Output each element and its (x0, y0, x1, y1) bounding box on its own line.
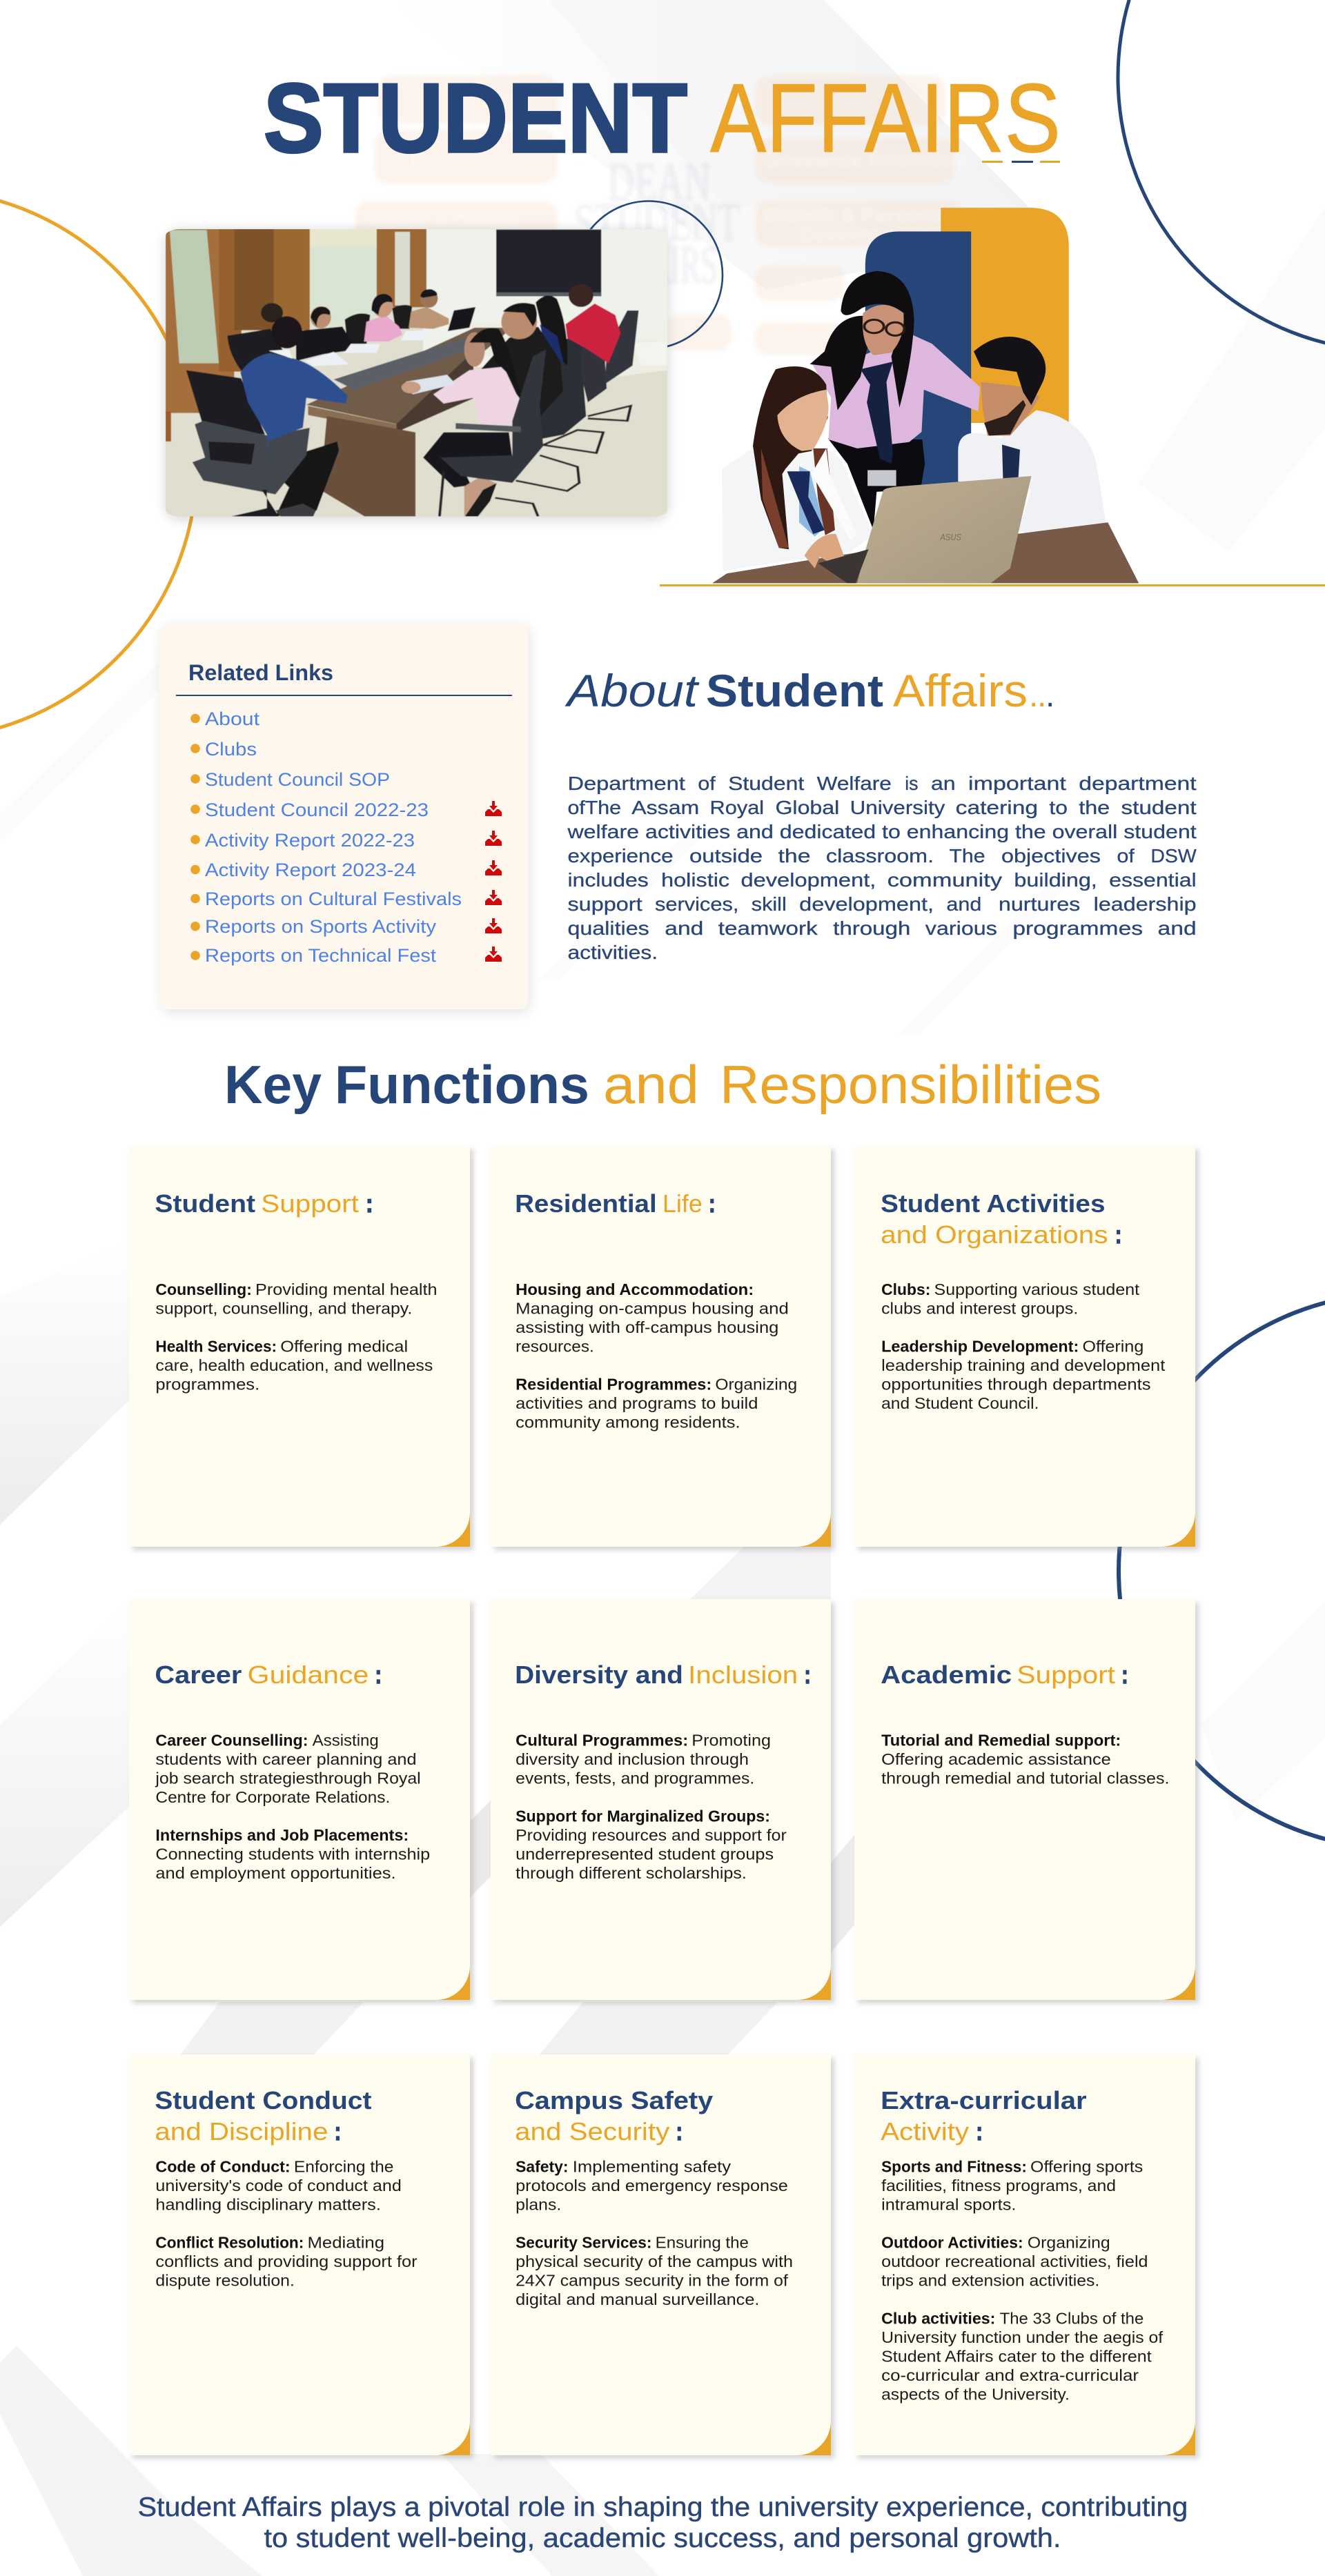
text: student support details: Counselling: (155, 1280, 252, 1298)
standing woman (810, 271, 980, 530)
text: student support details: care, health education, and wellness (155, 1356, 433, 1374)
text: campus safety details: Safety: (516, 2158, 569, 2175)
laptop: ASUS (940, 533, 961, 543)
text block: about paragraph: skill (752, 893, 787, 915)
text block: about paragraph: support (567, 893, 642, 915)
link list: Reports on Sports Activity (205, 916, 437, 937)
heading: student activities and organizations (881, 1190, 1121, 1249)
heading: student conduct and discipline: and Discipline (155, 2118, 328, 2146)
heading: diversity and inclusion: Diversity and (515, 1661, 683, 1689)
heading: about student affairs: About (565, 665, 700, 716)
woman in black (296, 326, 356, 361)
heading: extra-curricular activity: Extra-curricular (881, 2087, 1087, 2114)
text: campus safety details: Implementing safety (573, 2158, 731, 2175)
heading: residential life: : (709, 1190, 715, 1218)
text: student activities details: clubs and interest groups. (881, 1300, 1078, 1317)
woman in pink cardigan (364, 315, 402, 341)
text block: about paragraph: of (1117, 844, 1135, 866)
text: diversity and inclusion details: underrepresented student groups (516, 1845, 774, 1863)
text block: about paragraph: University (850, 796, 945, 818)
background: ghosted organisation chart (355, 75, 968, 355)
text: student activities details: opportunities through departments (881, 1376, 1151, 1393)
table front (308, 406, 396, 433)
man in tan jacket (409, 307, 449, 329)
text: student support details (155, 1280, 437, 1393)
background: ghosted organisation chart: Clubs (766, 327, 823, 350)
text: student activities details: Clubs: (881, 1280, 930, 1298)
text: residential life details: Organizing (715, 1376, 797, 1393)
text block: about paragraph: essential (1109, 869, 1197, 891)
decorative circle: right navy beside cards (1119, 1294, 1325, 1848)
text: residential life details: Managing on-campus housing and (516, 1300, 789, 1317)
heading: student support: Support (261, 1190, 359, 1218)
text: extra-curricular details: Organizing (1028, 2234, 1110, 2251)
text: student activities details: Offering (1082, 1338, 1144, 1355)
decorative circle: left orange (0, 190, 197, 739)
heading: career guidance: Career (155, 1661, 242, 1689)
text block: about paragraph: Welfare (817, 772, 892, 794)
title: STUDENT (264, 63, 687, 173)
text: residential life details (516, 1280, 797, 1431)
seated woman (722, 366, 874, 571)
title: AFFAIRS (710, 63, 1061, 173)
heading: key functions and responsibilities (224, 1054, 1101, 1115)
background: ghosted organisation chart: STUDENT (574, 192, 740, 252)
background: ghosted organisation chart: Counselling (411, 149, 529, 172)
link list: Reports on Cultural Festivals (205, 889, 462, 909)
heading: career guidance: : (375, 1661, 382, 1689)
text: diversity and inclusion details: events, fests, and programmes. (516, 1770, 754, 1787)
front chair (440, 350, 546, 483)
text: residential life details: Residential Programmes: (516, 1376, 711, 1393)
heading: campus safety and security (515, 2087, 714, 2146)
heading: about student affairs: Student (706, 665, 883, 716)
text block: about paragraph: and (665, 917, 703, 939)
text: student conduct details: Code of Conduct: (155, 2158, 291, 2175)
panel: diversity and inclusion (491, 1599, 834, 2003)
laptop (448, 307, 475, 331)
decorative circle: small navy behind photo (575, 201, 723, 349)
text: career guidance details: students with career planning and (155, 1750, 417, 1768)
text: student support details: Providing mental health (255, 1280, 437, 1298)
text block: about paragraph: of (698, 772, 716, 794)
closing statement: to student well-being, academic success, and personal growth. (264, 2524, 1061, 2553)
text: student conduct details: university's code of conduct and (155, 2177, 402, 2194)
text block: about paragraph: to (1049, 796, 1068, 818)
text: student activities details: Supporting various student (934, 1280, 1140, 1298)
laptop (818, 476, 1031, 583)
heading: about student affairs: Affairs (893, 665, 1028, 716)
text block: about paragraph: the (778, 844, 810, 866)
text: academic support details (881, 1732, 1169, 1787)
heading: campus safety and security: and Security (515, 2118, 670, 2146)
heading: diversity and inclusion (515, 1661, 811, 1689)
text: diversity and inclusion details: Providing resources and support for (516, 1826, 787, 1844)
text: student conduct details: conflicts and providing support for (155, 2252, 418, 2270)
text: student support details: support, counselling, and therapy. (155, 1300, 412, 1317)
text block: about paragraph: and (1158, 917, 1197, 939)
blue sweater man (240, 353, 348, 460)
text block: about paragraph: building, (1014, 869, 1097, 891)
heading: student activities and organizations: and Organizations (881, 1221, 1108, 1249)
text block: about paragraph: catering (956, 796, 1038, 818)
text: extra-curricular details: aspects of the University. (881, 2386, 1070, 2403)
text: student conduct details: Conflict Resolution: (155, 2234, 304, 2251)
heading: key functions and responsibilities: and (603, 1054, 699, 1115)
text: academic support details: Tutorial and Remedial support: (881, 1732, 1121, 1749)
text block: about paragraph: development, (740, 869, 876, 891)
text block: about paragraph: ofThe (567, 796, 621, 818)
heading: student support: Student (155, 1190, 255, 1218)
text block: about paragraph: teamwork (718, 917, 818, 939)
heading: student support (155, 1190, 373, 1218)
table surface (306, 328, 505, 424)
text: extra-curricular details: Offering sports (1030, 2158, 1143, 2175)
text block: about paragraph: nurtures (999, 893, 1080, 915)
closing statement (138, 2493, 1188, 2553)
text block: about paragraph: is (905, 772, 919, 794)
heading: about student affairs: . (1029, 677, 1038, 714)
heading: extra-curricular activity: : (976, 2118, 983, 2146)
background: ghosted organisation chart: Grievance Redressal (763, 149, 968, 172)
text: extra-curricular details: Outdoor Activities: (881, 2234, 1023, 2251)
heading: related links: Related Links (188, 660, 333, 685)
background: ghosted organisation chart: AFFAIRS (593, 235, 718, 295)
link list: Student Council SOP (205, 769, 390, 790)
icons: download (485, 801, 502, 962)
far chairs (345, 305, 412, 345)
background: ghosted organisation chart: DEAN (607, 152, 711, 212)
text: extra-curricular details: Sports and Fitness: (881, 2158, 1027, 2175)
heading: student conduct and discipline: Student Conduct (155, 2087, 371, 2114)
heading: residential life: Life (662, 1190, 703, 1218)
background: ghosted organisation chart: Hostel & Dining (366, 211, 520, 234)
text block: about paragraph: Assam (631, 796, 699, 818)
link list: Clubs (205, 739, 257, 760)
text block: about paragraph: important (968, 772, 1066, 794)
text: campus safety details: 24X7 campus security in the form of (516, 2272, 788, 2289)
text: diversity and inclusion details: diversity and inclusion through (516, 1750, 749, 1768)
text block: about paragraph: leadership (1094, 893, 1197, 915)
text block: about paragraph: through (833, 917, 910, 939)
right side chairs (540, 338, 587, 439)
text block: about paragraph: outside (689, 844, 763, 866)
text: diversity and inclusion details: Promoting (691, 1732, 771, 1749)
text: extra-curricular details: outdoor recreational activities, field (881, 2252, 1148, 2270)
text: career guidance details (155, 1732, 430, 1882)
panel: academic support (854, 1599, 1199, 2003)
text: student activities details: Leadership Development: (881, 1338, 1079, 1355)
text block: about paragraph: Student (728, 772, 804, 794)
text: extra-curricular details: University function under the aegis of (881, 2328, 1164, 2346)
text: diversity and inclusion details: Cultural Programmes: (516, 1732, 688, 1749)
text: diversity and inclusion details: through different scholarships. (516, 1864, 747, 1882)
panel: extra-curricular activity (854, 2054, 1199, 2459)
heading: campus safety and security: Campus Safety (515, 2087, 714, 2114)
link list (190, 709, 462, 966)
text block: about paragraph: includes (567, 869, 649, 891)
photo: meeting room (166, 229, 668, 519)
text: residential life details: Housing and Accommodation: (516, 1280, 754, 1298)
heading: academic support: Academic (881, 1661, 1012, 1689)
link list: Activity Report 2023-24 (205, 860, 416, 880)
text: extra-curricular details: Club activities: (881, 2310, 995, 2327)
text: campus safety details: Security Services: (516, 2234, 651, 2251)
text: career guidance details: Connecting students with internship (155, 1845, 430, 1863)
text: career guidance details: and employment opportunities. (155, 1864, 396, 1882)
link list: Student Council 2022-23 (205, 800, 429, 820)
background: ghosted organisation chart: Sports (794, 272, 859, 295)
heading: residential life (515, 1190, 715, 1218)
panel: residential life (491, 1146, 834, 1550)
text block: about paragraph: Global (775, 796, 839, 818)
blue sweater man legs and chair (265, 442, 339, 517)
heading: campus safety and security: : (676, 2118, 683, 2146)
text block: about paragraph: experience (567, 844, 674, 866)
panel: campus safety and security (491, 2054, 834, 2459)
heading: student activities and organizations: Student Activities (881, 1190, 1106, 1218)
heading: about student affairs (565, 665, 1054, 716)
text: student conduct details (155, 2158, 418, 2289)
text: extra-curricular details: The 33 Clubs of the (1000, 2310, 1144, 2327)
decorative circle: top right navy (1118, 0, 1325, 351)
text: residential life details: community among residents. (516, 1414, 740, 1431)
text block: about paragraph: an (931, 772, 956, 794)
text: student conduct details: Enforcing the (294, 2158, 393, 2175)
heading: student support: : (366, 1190, 373, 1218)
text: extra-curricular details (881, 2158, 1164, 2403)
text: student support details: Offering medical (280, 1338, 408, 1355)
heading: diversity and inclusion: Inclusion (688, 1661, 798, 1689)
link list: Reports on Technical Fest (205, 945, 437, 966)
text block: about paragraph: The (950, 844, 985, 866)
text block: about paragraph: Royal (710, 796, 764, 818)
papers on table (304, 330, 431, 366)
text: campus safety details: physical security of the campus with (516, 2252, 793, 2270)
text: student activities details (881, 1280, 1166, 1412)
text block: about paragraph: DSW (1150, 844, 1197, 866)
text block: about paragraph: various (925, 917, 997, 939)
heading: academic support: : (1121, 1661, 1128, 1689)
text block: about paragraph: department (1079, 772, 1197, 794)
heading: academic support: Support (1017, 1661, 1115, 1689)
text: campus safety details (516, 2158, 793, 2308)
text block: about paragraph: Department (567, 772, 685, 794)
link list: Activity Report 2022-23 (205, 830, 415, 851)
text: campus safety details: plans. (516, 2196, 561, 2213)
text: student support details: programmes. (155, 1376, 259, 1393)
text: career guidance details: Career Counselling: (155, 1732, 308, 1749)
front pink woman legs (423, 433, 512, 488)
text: student activities details: leadership training and development (881, 1356, 1166, 1374)
heading: student conduct and discipline (155, 2087, 371, 2146)
heading: extra-curricular activity: Activity (881, 2118, 970, 2146)
navy backdrop panel (865, 232, 971, 489)
heading: student activities and organizations: : (1115, 1221, 1121, 1249)
text: campus safety details: protocols and emergency response (516, 2177, 788, 2194)
text block: about paragraph: objectives (1001, 844, 1101, 866)
text: residential life details: activities and programs to build (516, 1394, 758, 1412)
text: diversity and inclusion details (516, 1732, 787, 1882)
long hair woman (536, 296, 567, 366)
text: campus safety details: digital and manual surveillance. (516, 2290, 759, 2308)
panel: student activities and organizations (854, 1146, 1199, 1550)
heading: extra-curricular activity (881, 2087, 1087, 2146)
background: ghosted organisation chart: Development (801, 224, 930, 246)
closing statement: Student Affairs plays a pivotal role in shaping the university experience, contributing (138, 2493, 1188, 2522)
text: career guidance details: Assisting (313, 1732, 379, 1749)
text: campus safety details: Ensuring the (656, 2234, 749, 2251)
heading: key functions and responsibilities: Key (224, 1054, 322, 1115)
text: academic support details: Offering academic assistance (881, 1750, 1111, 1768)
text block: about paragraph: programmes (1012, 917, 1143, 939)
heading: career guidance: Guidance (248, 1661, 369, 1689)
text block: about paragraph: holistic (661, 869, 729, 891)
red jacket man (565, 304, 620, 364)
panel: related links (159, 624, 530, 1013)
table (712, 522, 1139, 583)
heading: about student affairs: . (1046, 677, 1054, 714)
text block: about paragraph: qualities (567, 917, 649, 939)
text: extra-curricular details: co-curricular and extra-curricular (881, 2366, 1139, 2384)
text block: about paragraph: activities. (567, 941, 658, 963)
text: diversity and inclusion details: Support for Marginalized Groups: (516, 1807, 770, 1825)
front pink woman (433, 367, 519, 425)
text: extra-curricular details: intramural sports. (881, 2196, 1016, 2213)
far left man (227, 329, 289, 375)
text: career guidance details: job search strategiesthrough Royal (155, 1770, 421, 1787)
text: extra-curricular details: facilities, fitness programs, and (881, 2177, 1116, 2194)
text block: about paragraph: services, (655, 893, 738, 915)
orange backdrop panel (941, 208, 1069, 423)
text: residential life details: resources. (516, 1338, 594, 1355)
heading: key functions and responsibilities: Responsibilities (720, 1054, 1101, 1115)
text: student conduct details: handling disciplinary matters. (155, 2196, 381, 2213)
heading: key functions and responsibilities: Functions (335, 1054, 589, 1115)
text: student support details: Health Services: (155, 1338, 277, 1355)
text: student activities details: and Student Council. (881, 1394, 1039, 1412)
panel: career guidance (129, 1599, 473, 2003)
text: residential life details: assisting with off-campus housing (516, 1318, 778, 1336)
panel: student conduct and discipline (129, 2054, 473, 2459)
panel: student support (129, 1146, 473, 1550)
title underline dashes (982, 161, 1060, 163)
title (264, 63, 1061, 173)
text block: about paragraph: classroom. (826, 844, 934, 866)
seated man (958, 337, 1106, 542)
heading: student conduct and discipline: : (335, 2118, 341, 2146)
heading: residential life: Residential (515, 1190, 657, 1218)
text: extra-curricular details: trips and extension activities. (881, 2272, 1099, 2289)
text block: about paragraph (567, 772, 1197, 963)
background: ghosted organisation chart: Growth & Personal (763, 204, 949, 227)
link list: About (205, 709, 260, 729)
orange horizontal rule (660, 584, 1325, 586)
text: academic support details: through remedial and tutorial classes. (881, 1770, 1169, 1787)
heading: academic support (881, 1661, 1128, 1689)
text block: about paragraph: development, (799, 893, 934, 915)
black suit man (478, 326, 563, 421)
text: career guidance details: Internships and Job Placements: (155, 1826, 409, 1844)
text: student conduct details: dispute resolution. (155, 2272, 295, 2289)
text: student conduct details: Mediating (307, 2234, 384, 2251)
heading: career guidance (155, 1661, 382, 1689)
heading: about student affairs: . (1037, 677, 1046, 714)
text block: about paragraph: community (887, 869, 1003, 891)
text: career guidance details: Centre for Corporate Relations. (155, 1788, 390, 1806)
text block: about paragraph: student (1121, 796, 1197, 818)
text block: about paragraph: welfare activities and dedicated to enhancing the overall student (567, 820, 1197, 842)
text block: about paragraph: and (946, 893, 981, 915)
text: extra-curricular details: Student Affairs cater to the different (881, 2348, 1152, 2365)
text block: about paragraph: the (1079, 796, 1110, 818)
photo: three students cut-out (712, 208, 1139, 583)
heading: diversity and inclusion: : (805, 1661, 811, 1689)
